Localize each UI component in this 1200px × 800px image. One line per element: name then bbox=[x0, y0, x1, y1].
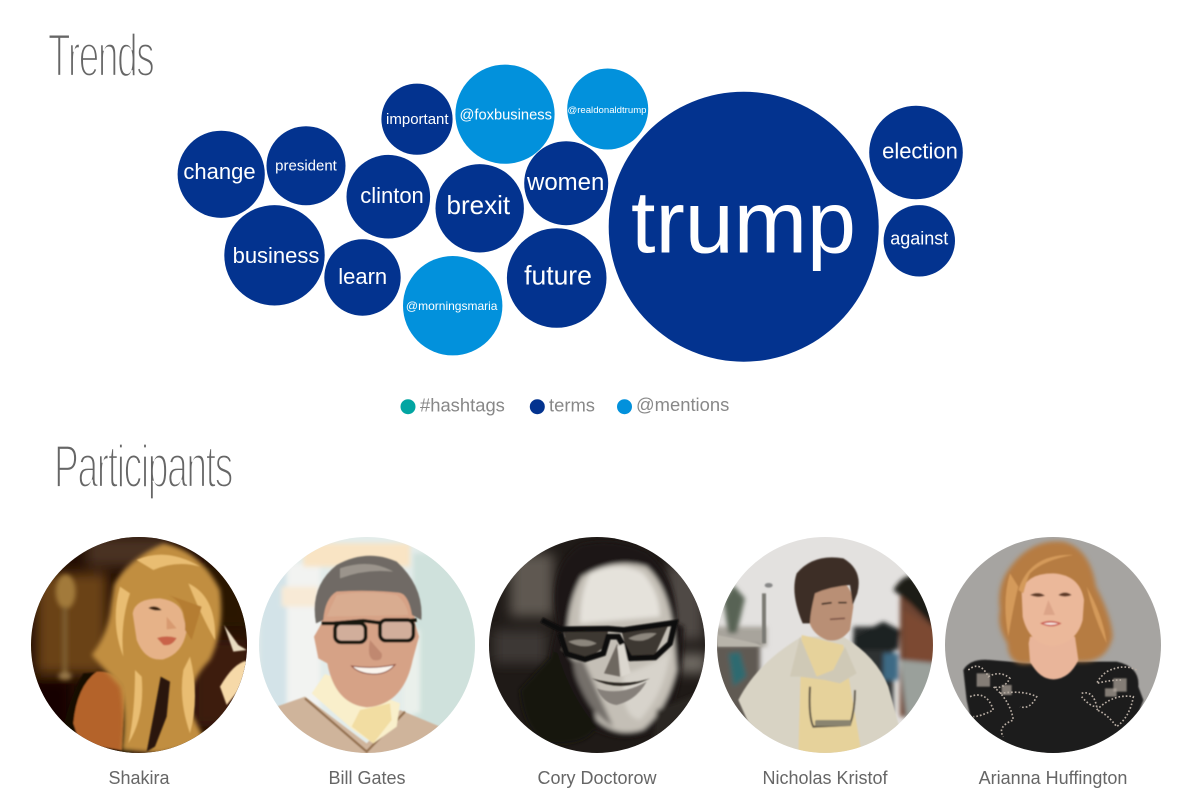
participant: Bill Gates bbox=[253, 533, 480, 788]
portrait: Arianna Huffington bbox=[943, 533, 1163, 760]
heading: Participants: Participants bbox=[54, 433, 233, 500]
bubble: learn bbox=[324, 239, 401, 316]
legend bbox=[400, 394, 729, 416]
bubble: election bbox=[869, 106, 963, 199]
bubble: future bbox=[507, 228, 606, 328]
bubble: @morningsmaria: @morningsmaria bbox=[406, 299, 498, 313]
bubble: brexit: brexit bbox=[447, 190, 511, 220]
name: Arianna Huffington: Arianna Huffington bbox=[979, 768, 1127, 788]
participant: Arianna Huffington bbox=[943, 533, 1163, 788]
bubble: @realdonaldtrump bbox=[567, 68, 648, 150]
portrait: Shakira bbox=[27, 533, 253, 760]
bubble: @foxbusiness: @foxbusiness bbox=[459, 107, 552, 123]
legend item: terms: terms bbox=[549, 394, 595, 416]
bubble: clinton: clinton bbox=[360, 183, 424, 208]
participant: Shakira bbox=[27, 533, 253, 788]
name: Nicholas Kristof: Nicholas Kristof bbox=[762, 768, 889, 788]
portrait: Nicholas Kristof bbox=[713, 533, 940, 760]
name: Bill Gates: Bill Gates bbox=[328, 768, 406, 788]
bubble: business bbox=[224, 205, 325, 306]
legend item: #hashtags: #hashtags bbox=[420, 394, 505, 416]
bubble: women: women bbox=[526, 169, 604, 196]
name: Cory Doctorow: Cory Doctorow bbox=[537, 768, 658, 788]
bubble: learn: learn bbox=[338, 264, 387, 289]
bubble: election: election bbox=[882, 139, 958, 164]
participant: Nicholas Kristof bbox=[713, 533, 940, 788]
participant: Cory Doctorow bbox=[487, 533, 713, 788]
bubble chart: trends bbox=[178, 65, 963, 362]
bubble: trump bbox=[609, 92, 879, 362]
portrait: Cory Doctorow bbox=[487, 533, 713, 760]
bubble: change: change bbox=[183, 159, 256, 184]
bubble: important bbox=[381, 84, 453, 155]
bubble: @morningsmaria bbox=[403, 256, 502, 355]
bubble: women bbox=[524, 141, 608, 225]
bubble: trump: trump bbox=[631, 173, 856, 272]
heading: Trends: Trends bbox=[48, 22, 154, 89]
bubble: important: important bbox=[386, 111, 449, 128]
bubble: president: president bbox=[275, 158, 338, 175]
bubble: change bbox=[178, 131, 265, 218]
bubble: @foxbusiness bbox=[455, 65, 555, 164]
bubble: business: business bbox=[233, 243, 319, 268]
bubble: future: future bbox=[524, 260, 592, 290]
bubble: president bbox=[266, 126, 346, 205]
name: Shakira: Shakira bbox=[108, 768, 171, 788]
portrait: Bill Gates bbox=[253, 533, 480, 760]
bubble: against: against bbox=[890, 228, 948, 248]
bubble: clinton bbox=[346, 155, 430, 238]
bubble: @realdonaldtrump: @realdonaldtrump bbox=[567, 105, 647, 116]
bubble: brexit bbox=[436, 164, 524, 252]
bubble: against bbox=[884, 205, 955, 276]
legend item: @mentions: @mentions bbox=[636, 394, 729, 415]
